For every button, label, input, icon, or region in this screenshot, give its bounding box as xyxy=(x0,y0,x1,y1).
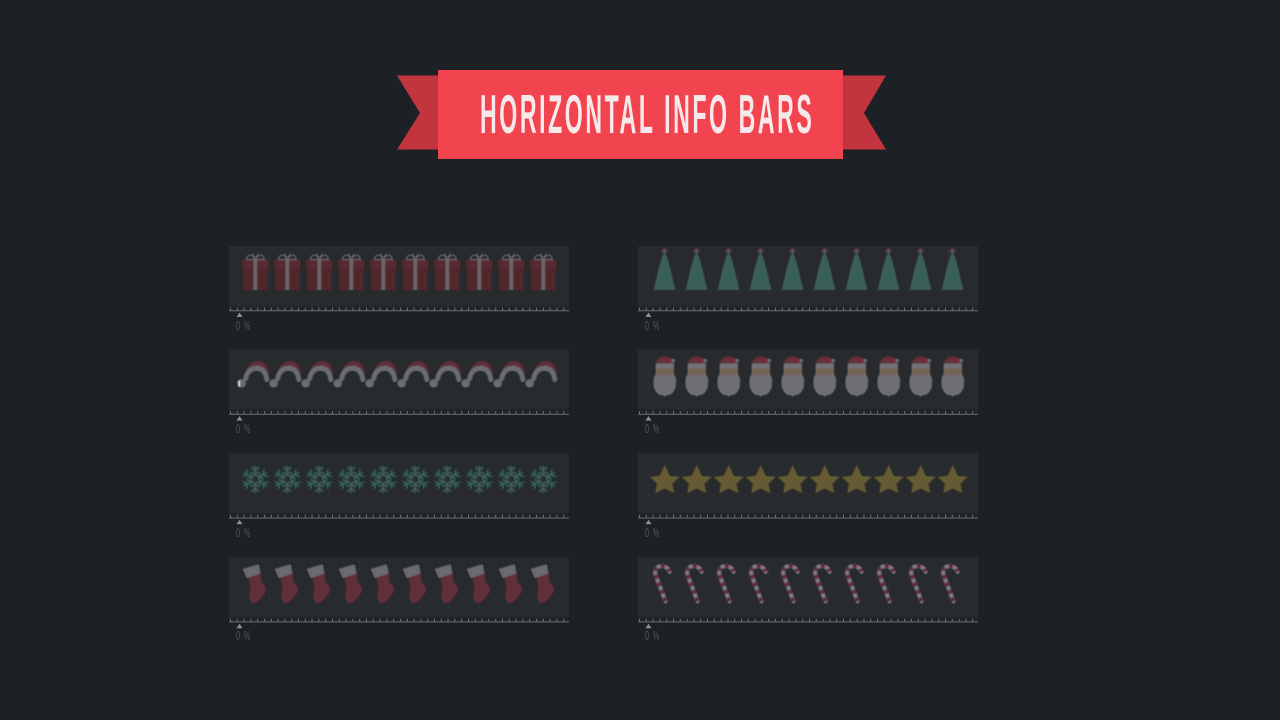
bar: trees xyxy=(638,246,978,334)
icons: santa hats xyxy=(237,361,557,388)
icons: candy canes xyxy=(655,566,958,601)
bar: gifts xyxy=(229,246,569,334)
value label: 0 % xyxy=(236,423,250,437)
icons: stars xyxy=(650,465,968,493)
value label: 0 % xyxy=(236,527,250,541)
ribbon main band xyxy=(438,70,843,159)
title: HORIZONTAL INFO BARS xyxy=(480,83,812,145)
icons: snowflakes xyxy=(242,466,557,493)
value label: 0 % xyxy=(236,320,250,334)
value label: 0 % xyxy=(645,527,659,541)
icons: santa faces xyxy=(653,357,964,397)
bar: stockings xyxy=(229,557,569,644)
icons: stockings xyxy=(244,566,554,603)
bar: snowflakes xyxy=(229,453,569,541)
icons: gifts xyxy=(242,254,556,290)
title ribbon xyxy=(397,70,886,159)
bar: stars xyxy=(638,453,978,541)
bar: candy canes xyxy=(638,557,978,644)
ribbon right tail xyxy=(843,76,886,150)
ribbon left tail xyxy=(397,76,438,150)
value label: 0 % xyxy=(645,320,659,334)
value label: 0 % xyxy=(645,423,659,437)
icons: trees xyxy=(654,248,963,290)
bar: santa hats xyxy=(229,350,569,437)
value label: 0 % xyxy=(236,630,250,644)
bar: santa faces xyxy=(638,350,978,437)
value label: 0 % xyxy=(645,630,659,644)
